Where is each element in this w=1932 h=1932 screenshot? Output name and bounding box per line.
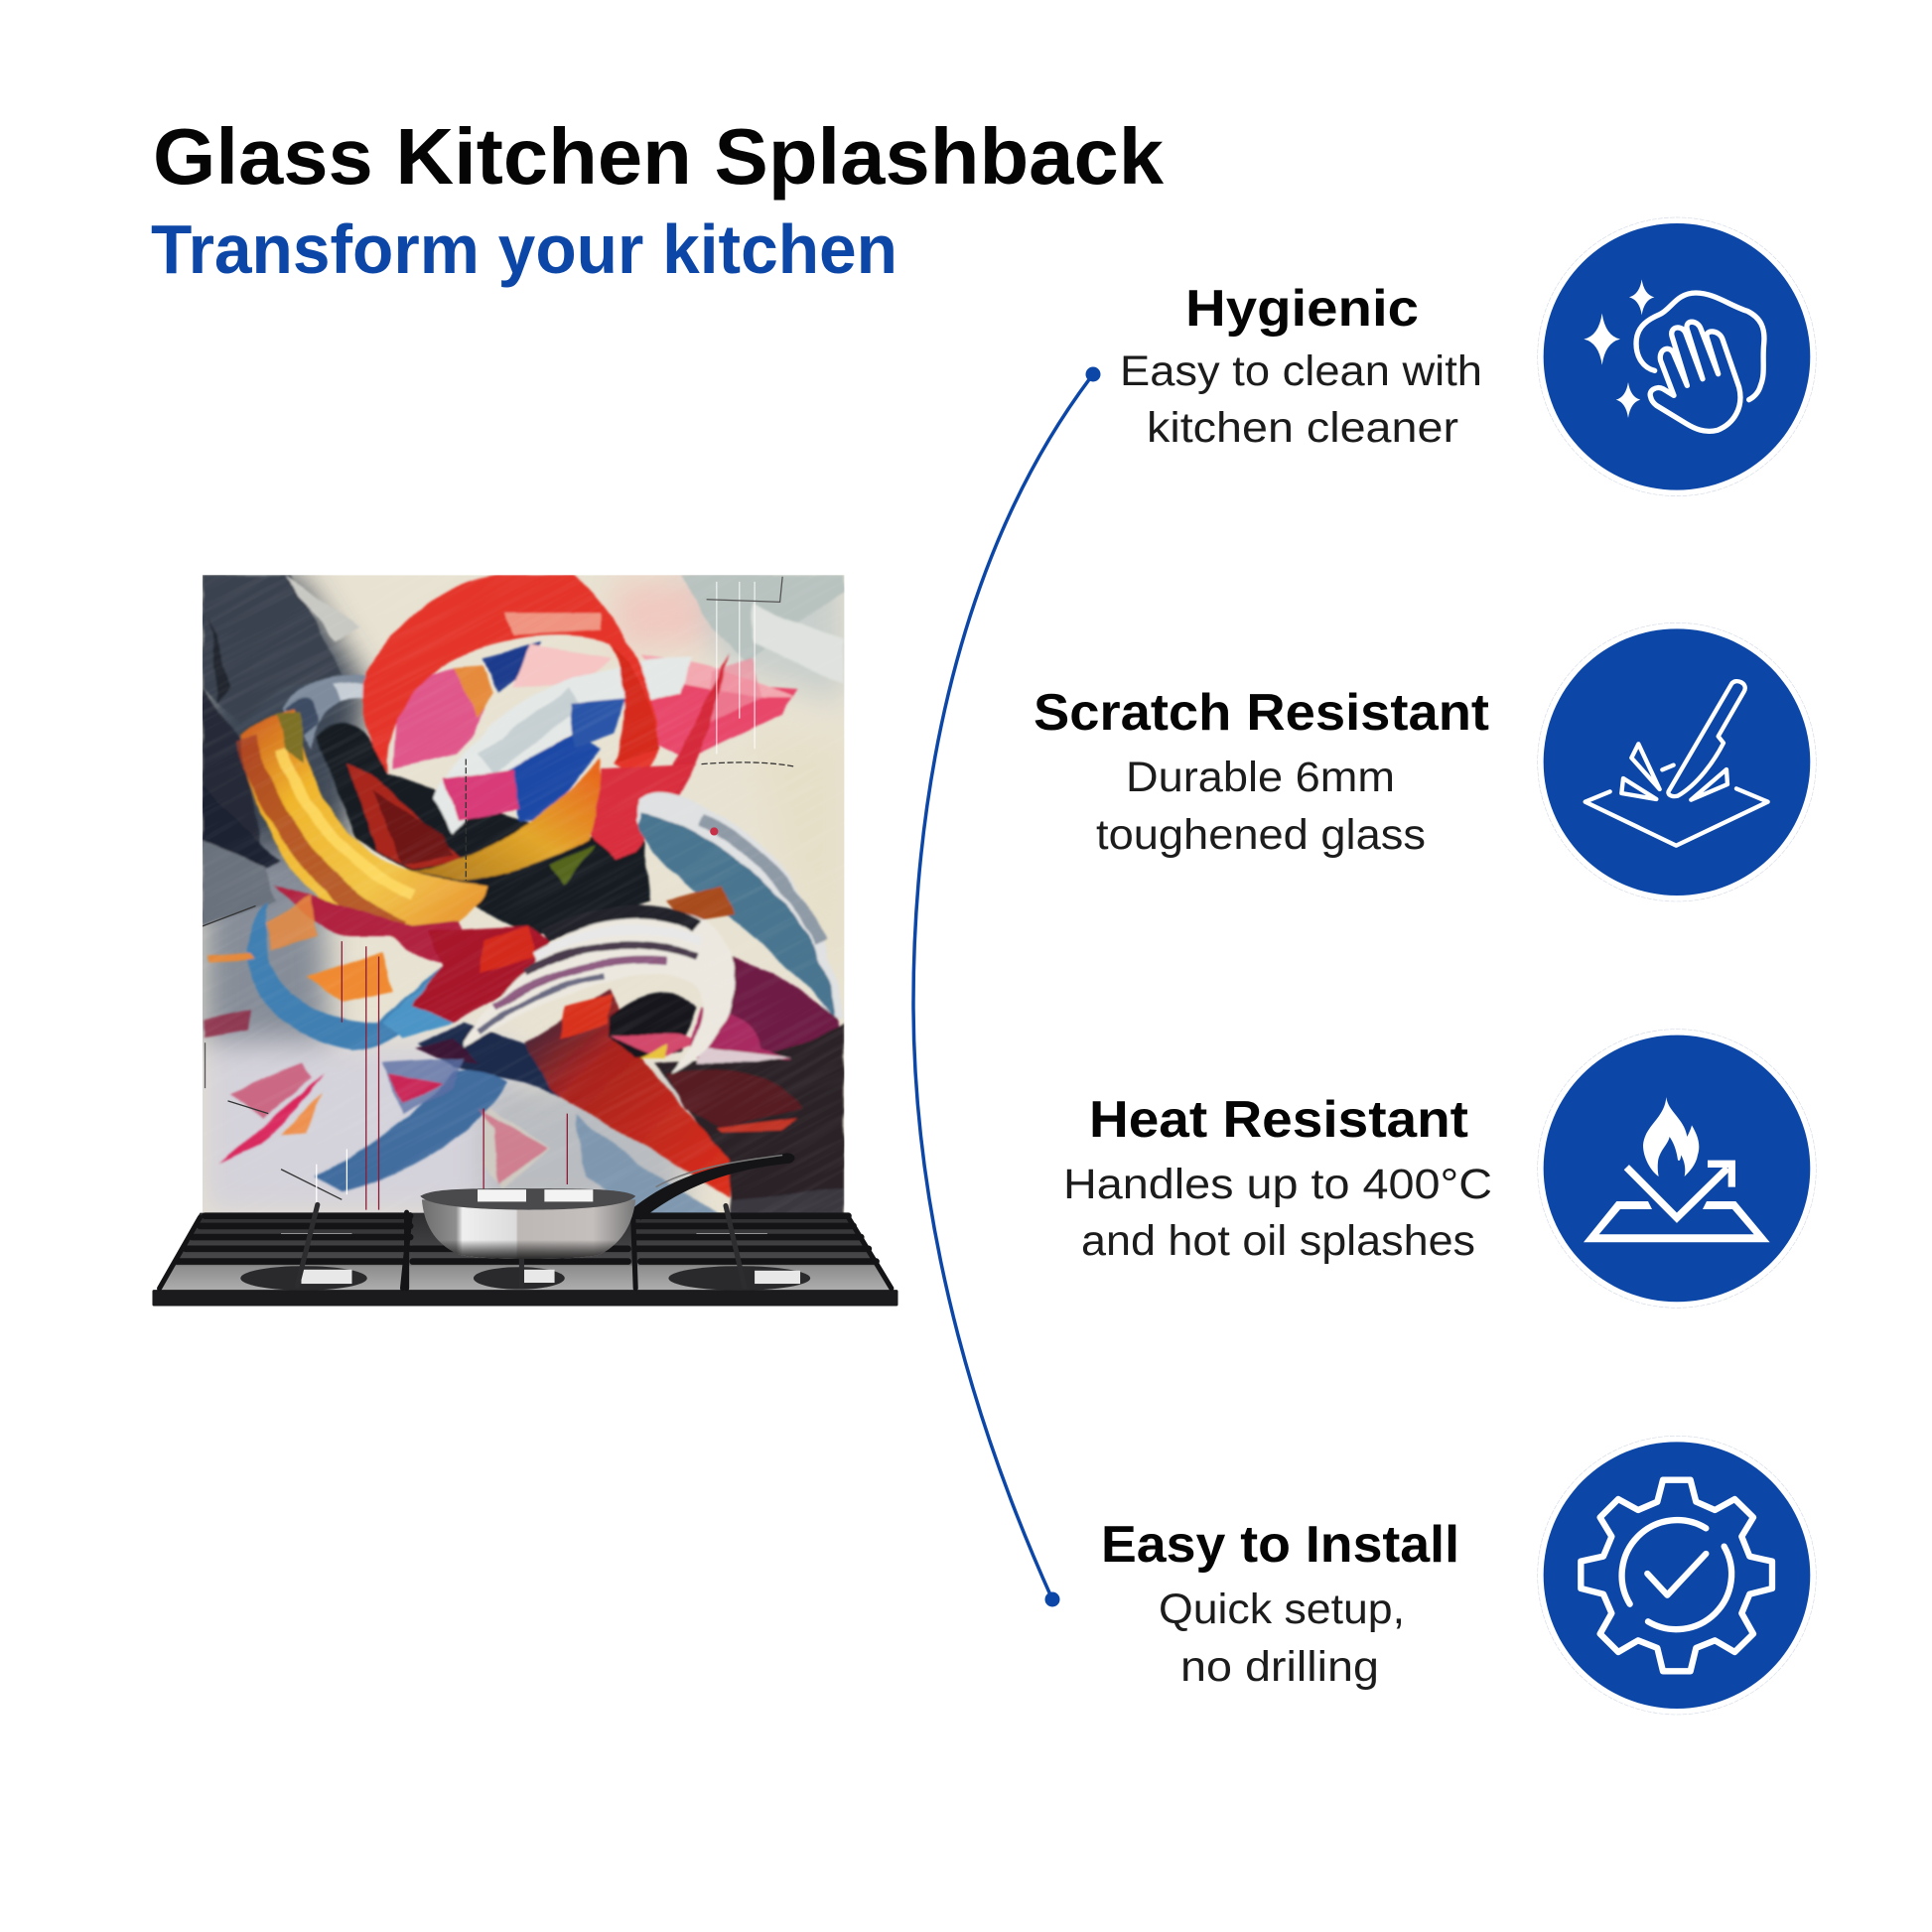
thin red wing	[671, 653, 731, 796]
icon: gear with check mark	[1538, 1436, 1816, 1715]
feature text: scratch resistant: Durable 6mm	[1126, 754, 1395, 801]
big red diagonal	[524, 990, 730, 1197]
feature text: heat resistant: Heat Resistant	[1089, 1091, 1468, 1149]
paint drips and scratches	[203, 577, 795, 1210]
feature text: easy to install: Quick setup,	[1159, 1586, 1405, 1633]
feature text: scratch resistant: toughened glass	[1096, 811, 1426, 859]
feature text: hygienic: Hygienic	[1185, 280, 1419, 338]
red ring	[362, 575, 658, 774]
frying pan	[420, 1153, 795, 1259]
paint dot	[710, 827, 718, 836]
product image: painted splashback above a gas hob	[152, 575, 897, 1307]
connector curve	[913, 367, 1100, 1606]
grey blue lower swirl	[575, 1114, 722, 1215]
feature text: scratch resistant	[1034, 684, 1489, 859]
upper-left dark and cream	[203, 575, 346, 724]
purple right	[729, 955, 841, 1053]
feature text: heat resistant: Handles up to 400°C	[1063, 1161, 1492, 1208]
title: Glass Kitchen Splashback	[153, 112, 1165, 201]
pink and white brush field	[649, 683, 798, 757]
feature text: hygienic: kitchen cleaner	[1147, 404, 1458, 452]
yellow main sweep	[239, 708, 488, 939]
right blue swirl	[635, 792, 843, 1018]
hob surface	[156, 1213, 894, 1292]
bowl	[422, 1199, 635, 1259]
feature text: easy to install	[1101, 1516, 1459, 1691]
feature text: hygienic: Easy to clean with	[1120, 347, 1482, 395]
bottom-right dark	[656, 1023, 844, 1215]
icon: flame over heat-reflecting surface	[1538, 1030, 1816, 1308]
handle	[628, 1153, 795, 1220]
dark centre mass	[317, 722, 651, 936]
top right grey swirl	[681, 575, 844, 663]
left blue arc and orange bits	[247, 900, 443, 1050]
feature text: heat resistant	[1063, 1091, 1492, 1265]
grey arc top-left	[282, 674, 367, 750]
white centre brush	[464, 908, 735, 1073]
gas hob	[152, 1204, 897, 1307]
yellow lower-right band	[413, 759, 600, 881]
icon: hand wiping with sparkles	[1538, 217, 1816, 496]
rim	[420, 1188, 635, 1210]
crimson and centre reds	[413, 926, 549, 1023]
brush texture	[203, 578, 842, 1173]
feature text: easy to install: no drilling	[1180, 1643, 1379, 1691]
subtitle: Transform your kitchen	[151, 210, 897, 288]
magenta shards	[219, 1074, 324, 1164]
bottom blue sweep	[314, 1071, 509, 1192]
navy diagonal stroke	[417, 1021, 562, 1098]
feature text: scratch resistant: Scratch Resistant	[1034, 684, 1489, 742]
icon: knife on glass surface	[1538, 622, 1816, 901]
feature text: hygienic	[1120, 280, 1482, 452]
painting	[203, 575, 844, 1213]
feature text: easy to install: Easy to Install	[1101, 1516, 1459, 1574]
grates	[160, 1204, 892, 1289]
burners	[240, 1233, 810, 1291]
feature text: heat resistant: and hot oil splashes	[1081, 1217, 1475, 1265]
